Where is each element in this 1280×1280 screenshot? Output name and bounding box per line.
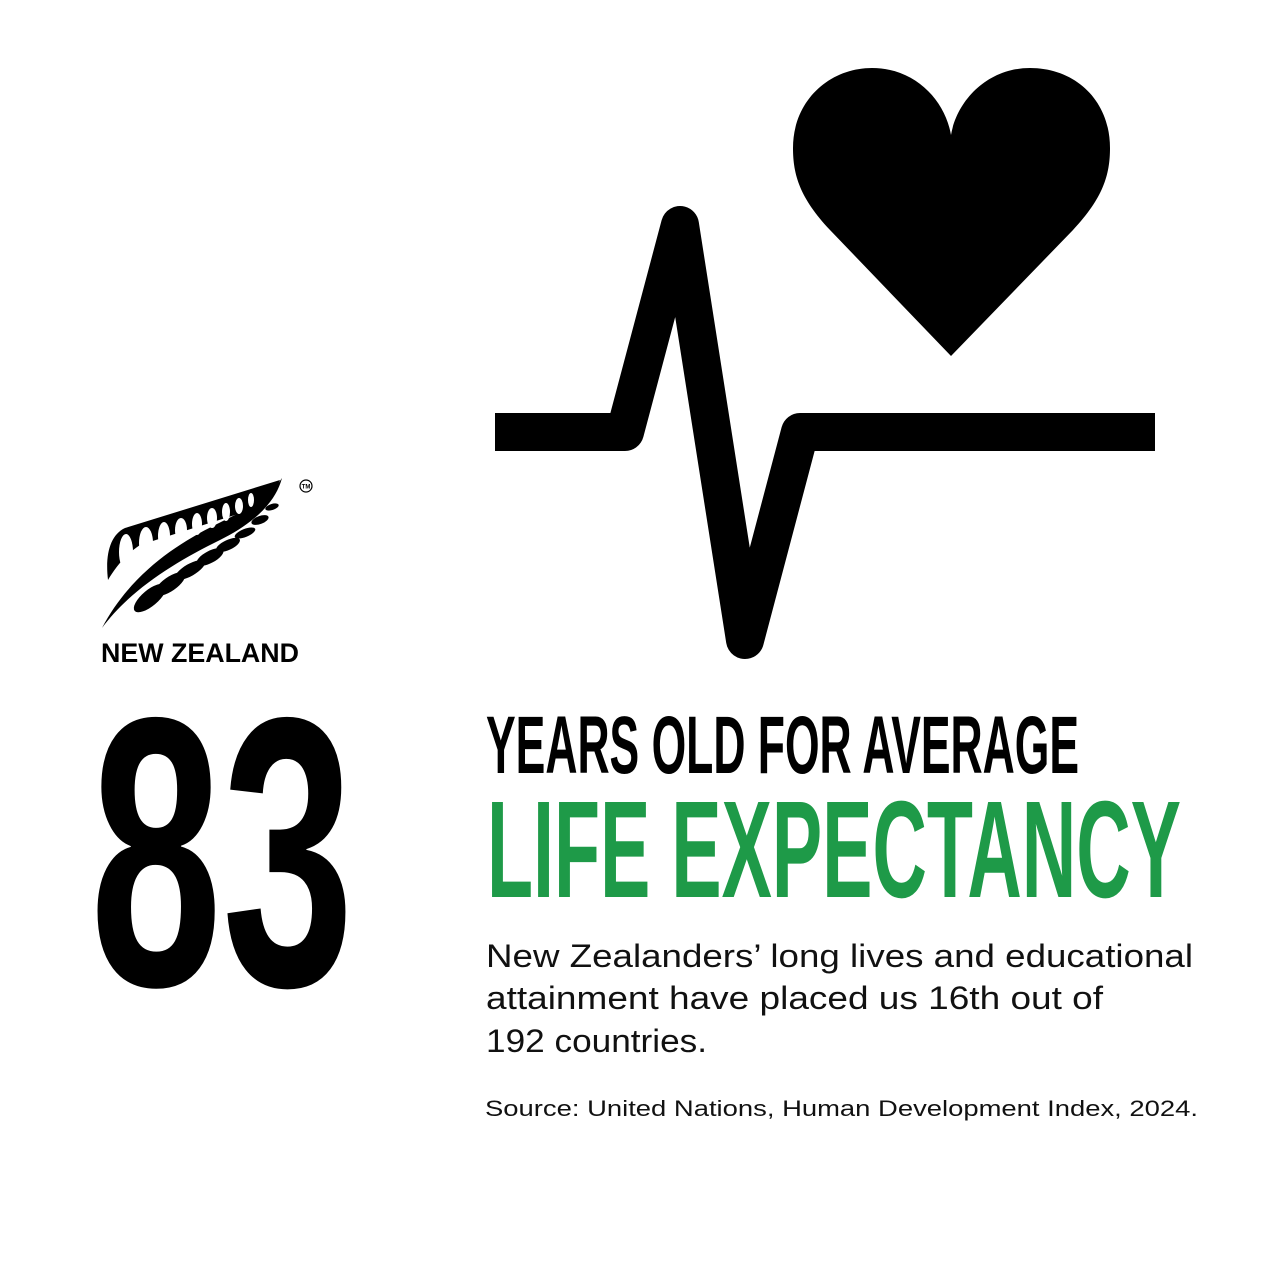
logo: New Zealand fern: NEW ZEALAND — [101, 638, 299, 668]
logo: New Zealand fern: TM — [302, 484, 310, 490]
source note: Source: United Nations, Human Development Index, 2024. — [485, 1096, 1198, 1121]
body text: attainment have placed us 16th out of — [486, 980, 1103, 1016]
body text: New Zealanders’ long lives and educational — [486, 938, 1193, 974]
body text: 192 countries. — [486, 1023, 707, 1059]
logo: New Zealand fern — [101, 478, 312, 668]
icon: heartbeat line — [495, 225, 1155, 640]
body text — [486, 938, 1193, 1059]
icon: heart — [793, 68, 1110, 356]
big number 83: 83 — [90, 638, 354, 1067]
